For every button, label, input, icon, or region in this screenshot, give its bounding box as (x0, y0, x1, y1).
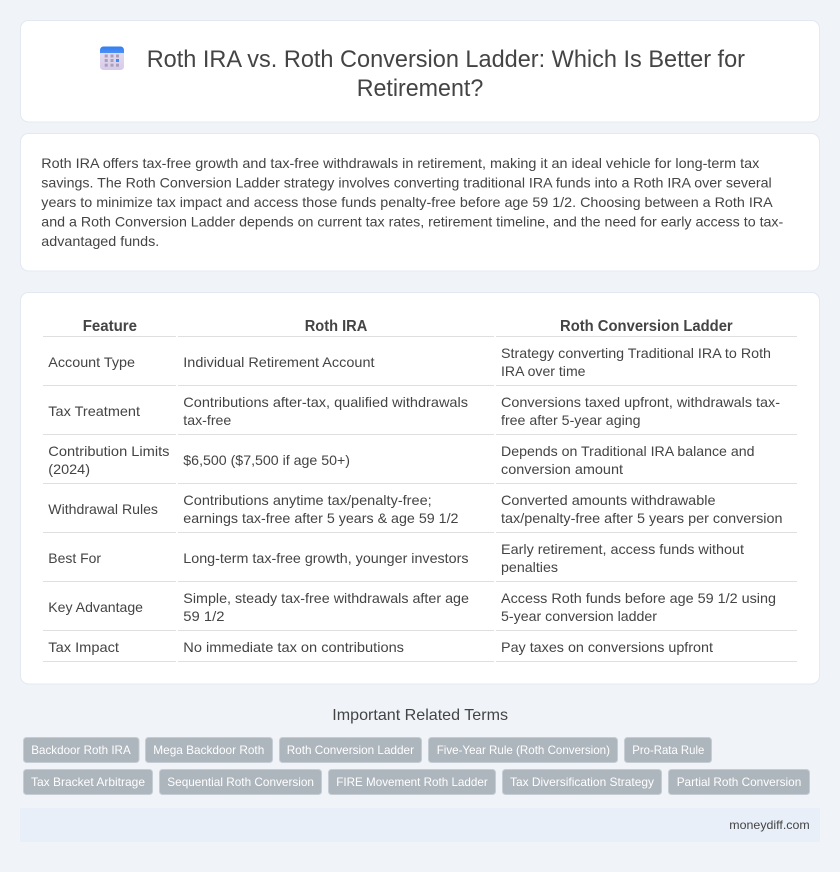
table row: tax treatment: Tax Treatment (48, 403, 140, 419)
text block: introduction paragraph: years to minimize tax impact and access those funds penalty-free before age 59 1/2. Choosing between a Roth IRA (41, 194, 773, 210)
table header row: Feature (83, 318, 137, 335)
table row: withdrawal rules: Contributions anytime tax/penalty-free; (183, 492, 432, 508)
tag: Tax Diversification Strategy: Tax Diversification Strategy (510, 775, 654, 789)
tag: FIRE Movement Roth Ladder (328, 770, 496, 794)
tag: Five-Year Rule (Roth Conversion) (428, 738, 618, 762)
table row: tax treatment: Contributions after-tax, qualified withdrawals (183, 394, 468, 410)
table row: key advantage: 5-year conversion ladder (501, 608, 657, 624)
table row: contribution limits: $6,500 ($7,500 if age 50+) (183, 452, 350, 468)
table header row: Roth Conversion Ladder (560, 318, 733, 335)
tag: Partial Roth Conversion: Partial Roth Conversion (677, 775, 801, 789)
table row: tax treatment: Conversions taxed upfront, withdrawals tax- (501, 394, 780, 410)
tag: Pro-Rata Rule (624, 738, 712, 762)
table row: contribution limits: Depends on Traditional IRA balance and (501, 443, 754, 459)
table row: withdrawal rules: earnings tax-free after 5 years & age 59 1/2 (183, 510, 459, 526)
table row: tax impact: No immediate tax on contributions (183, 639, 404, 655)
tag: FIRE Movement Roth Ladder: FIRE Movement Roth Ladder (336, 775, 488, 789)
footer bar: moneydiff.com (729, 818, 810, 832)
panel: comparison table (20, 292, 820, 684)
footer bar (20, 808, 820, 842)
table row: tax impact (43, 639, 797, 662)
table row: contribution limits (43, 443, 797, 484)
tag: Backdoor Roth IRA: Backdoor Roth IRA (31, 743, 131, 757)
table row: account type: IRA over time (501, 363, 586, 379)
tag: Sequential Roth Conversion (160, 770, 322, 794)
title: Retirement? (357, 75, 483, 102)
tag: Pro-Rata Rule: Pro-Rata Rule (632, 743, 705, 757)
tag: Tax Bracket Arbitrage (24, 770, 152, 794)
table row: account type (43, 345, 797, 386)
table row: tax impact: Tax Impact (48, 639, 119, 655)
table row: account type: Strategy converting Traditional IRA to Roth (501, 345, 771, 361)
tag list: related terms (24, 738, 810, 794)
table row: tax treatment: free after 5-year aging (501, 412, 640, 428)
table row: tax treatment: tax-free (183, 412, 232, 428)
title: Roth IRA vs. Roth Conversion Ladder: Which Is Better for (147, 46, 745, 73)
panel: header (20, 20, 820, 122)
panel: introduction (20, 134, 820, 271)
table header row: Roth IRA (305, 318, 368, 335)
tag: Mega Backdoor Roth: Mega Backdoor Roth (153, 743, 264, 757)
table row: tax treatment (43, 394, 797, 435)
table row: withdrawal rules: Withdrawal Rules (48, 501, 158, 517)
heading: important related terms: Important Related Terms (332, 707, 508, 724)
text block: introduction paragraph: savings. The Roth Conversion Ladder strategy involves converting traditional IRA funds into a Roth IRA over several (41, 174, 772, 190)
table row: contribution limits: (2024) (48, 461, 90, 477)
table row: contribution limits: conversion amount (501, 461, 623, 477)
table row: withdrawal rules: Converted amounts withdrawable (501, 492, 716, 508)
table row: key advantage (43, 590, 797, 631)
text block: introduction paragraph (41, 155, 784, 249)
table row: contribution limits: Contribution Limits (48, 443, 169, 459)
table row: key advantage: Simple, steady tax-free withdrawals after age (183, 590, 469, 606)
table row: tax impact: Pay taxes on conversions upfront (501, 639, 713, 655)
tag: Roth Conversion Ladder (280, 738, 422, 762)
tag: Tax Diversification Strategy (502, 770, 662, 794)
table row: key advantage: Access Roth funds before age 59 1/2 using (501, 590, 776, 606)
table row: best for: Long-term tax-free growth, younger investors (183, 550, 469, 566)
tag: Backdoor Roth IRA (24, 738, 139, 762)
table row: best for: Best For (48, 550, 101, 566)
table row: key advantage: 59 1/2 (183, 608, 225, 624)
table row: best for: Early retirement, access funds without (501, 541, 744, 557)
tag: Partial Roth Conversion (668, 770, 810, 794)
table row: account type: Account Type (48, 354, 135, 370)
table row: best for (43, 541, 797, 582)
table row: key advantage: Key Advantage (48, 599, 143, 615)
text block: introduction paragraph: advantaged funds. (41, 233, 159, 249)
tag: Five-Year Rule (Roth Conversion): Five-Year Rule (Roth Conversion) (437, 743, 610, 757)
table row: withdrawal rules: tax/penalty-free after 5 years per conversion (501, 510, 782, 526)
table row: best for: penalties (501, 559, 558, 575)
tag: Tax Bracket Arbitrage: Tax Bracket Arbitrage (31, 775, 145, 789)
table row: account type: Individual Retirement Account (183, 354, 375, 370)
tag: Sequential Roth Conversion: Sequential Roth Conversion (167, 775, 314, 789)
text block: introduction paragraph: Roth IRA offers tax-free growth and tax-free withdrawals in retirement, making it an ideal vehicle for long-term tax (41, 155, 759, 171)
table header row (43, 318, 797, 337)
text block: introduction paragraph: and a Roth Conversion Ladder depends on current tax rates, retirement timeline, and the need for early access to tax- (41, 214, 784, 230)
title (147, 46, 745, 102)
tag: Roth Conversion Ladder: Roth Conversion Ladder (287, 743, 414, 757)
icon: calendar (100, 46, 124, 70)
table row: withdrawal rules (43, 492, 797, 533)
tag: Mega Backdoor Roth (146, 738, 272, 762)
